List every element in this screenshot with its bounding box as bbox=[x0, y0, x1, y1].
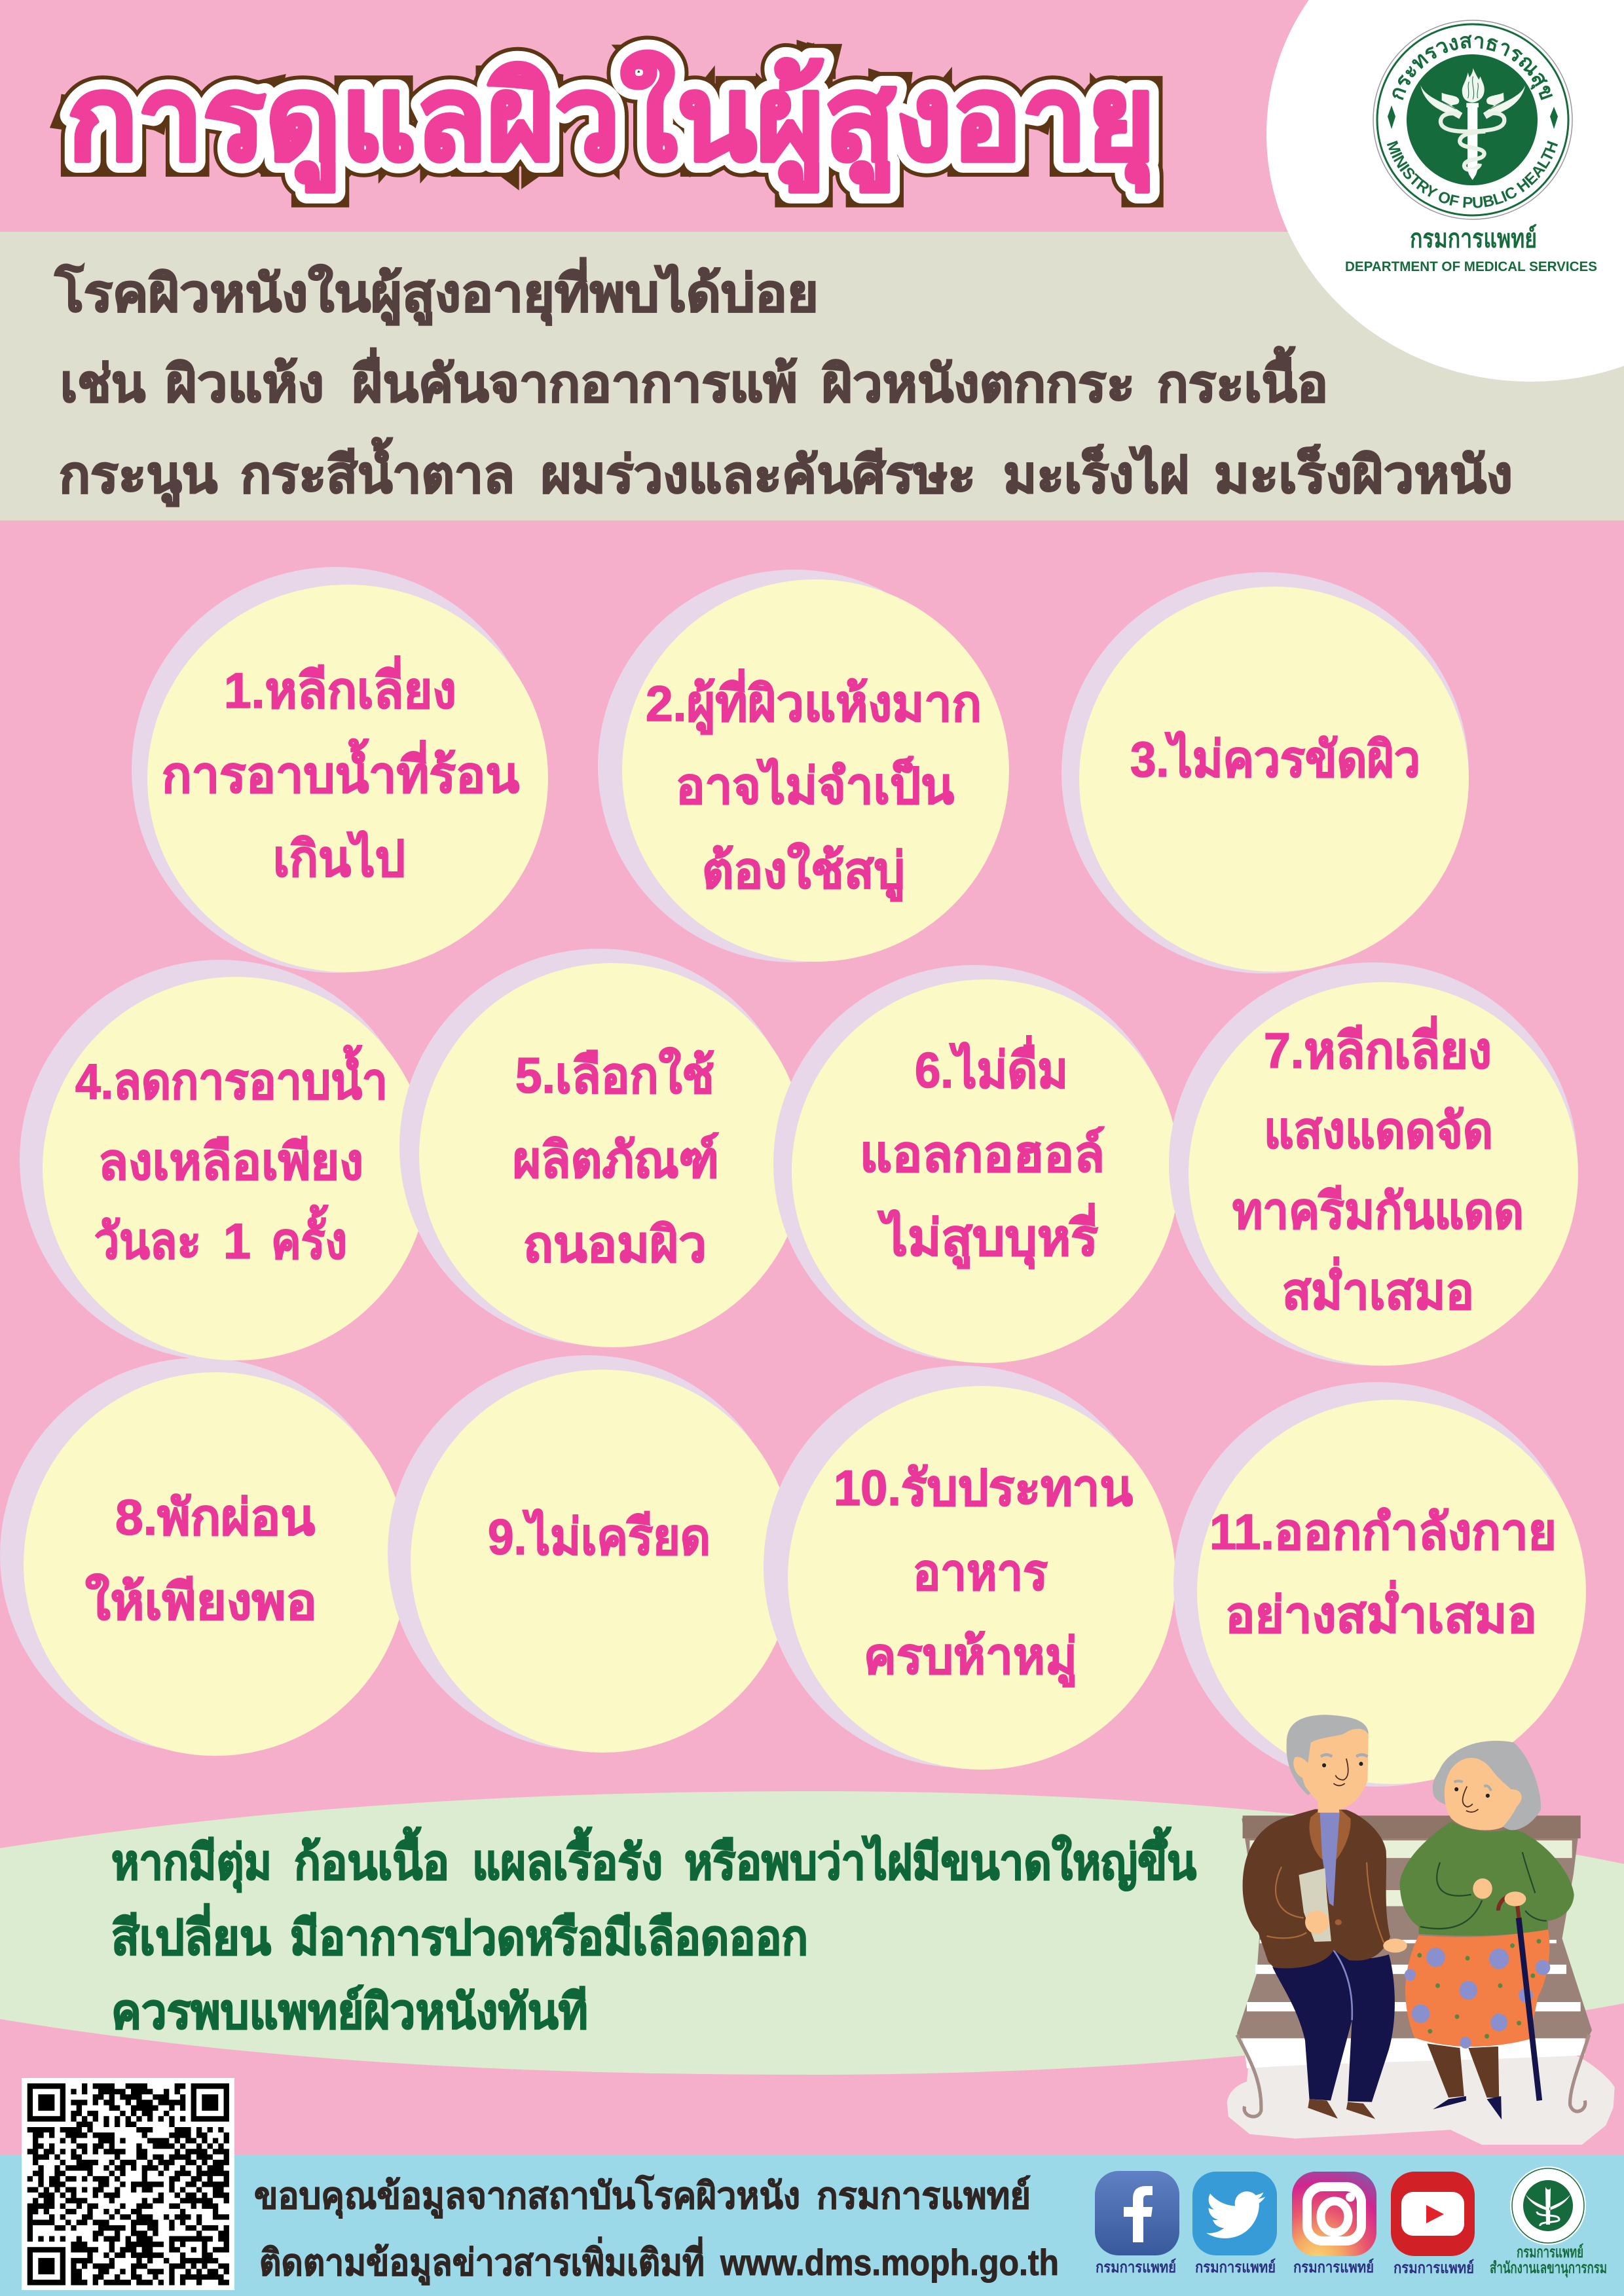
tip 11 bbox=[1173, 1382, 1586, 1787]
footer credit text bbox=[254, 2174, 1059, 2286]
advice text block: หากมีตุ่ม bbox=[111, 1835, 272, 1893]
QR code bbox=[22, 2078, 234, 2290]
intro text block: กระสีน้ำตาล bbox=[240, 437, 515, 503]
intro text block: เช่น bbox=[60, 355, 145, 412]
footer credit text: ขอบคุณข้อมูลจากสถาบันโรคผิวหนัง bbox=[254, 2174, 800, 2219]
seal ornaments bbox=[1388, 105, 1558, 129]
tip 5: 5.เลือกใช้ bbox=[515, 1047, 714, 1104]
logo: Ministry of Public Health seal bbox=[1373, 20, 1573, 220]
footer credit text: www.dms.moph.go.th bbox=[720, 2242, 1059, 2283]
intro text block bbox=[54, 257, 1513, 507]
advice text block: หรือพบว่าไฝมีขนาดใหญ่ขึ้น bbox=[684, 1827, 1196, 1891]
tip 7 bbox=[1169, 962, 1578, 1366]
tip 9 bbox=[388, 1355, 794, 1753]
footer credit text: ติดตามข้อมูลข่าวสารเพิ่มเติมที่ bbox=[259, 2236, 705, 2286]
advice text block: ควรพบแพทย์ผิวหนังทันที bbox=[111, 1984, 588, 2039]
tip 2: 2.ผู้ที่ผิวแห้งมาก bbox=[646, 668, 982, 735]
title: การดูแลผิวในผู้สูงอายุ bbox=[67, 51, 1155, 192]
advice text block: แผลเรื้อรัง bbox=[472, 1827, 663, 1889]
intro text block: กระเนื้อ bbox=[1157, 346, 1328, 412]
staff tip bbox=[1467, 169, 1478, 180]
department name Thai: กรมการแพทย์ bbox=[1410, 224, 1537, 253]
tip 4: 1 bbox=[223, 1214, 251, 1269]
tip 3 bbox=[1061, 572, 1469, 974]
advice text block: สีเปลี่ยน bbox=[111, 1903, 271, 1965]
mini logo label: กรมการแพทย์ bbox=[1517, 2243, 1583, 2261]
bench bbox=[1237, 1815, 1592, 2117]
tip 9: 9.ไม่เครียด bbox=[488, 1508, 710, 1565]
advice text block: ก้อนเนื้อ bbox=[294, 1827, 449, 1889]
tip 1: 1.หลีกเลี่ยง bbox=[224, 655, 456, 719]
tip 5: ถนอมผิว bbox=[523, 1217, 707, 1273]
intro text block: ผิวแห้ง bbox=[166, 355, 324, 412]
seal English ring text: MINISTRY OF PUBLIC HEALTH bbox=[1387, 140, 1558, 208]
department name English: DEPARTMENT OF MEDICAL SERVICES bbox=[1345, 259, 1597, 274]
tip 1: เกินไป bbox=[273, 830, 405, 887]
tip 4: ครั้ง bbox=[271, 1205, 347, 1269]
intro text block: มะเร็งไฝ bbox=[1003, 445, 1189, 503]
tip 2: อาจไม่จำเป็น bbox=[676, 756, 954, 814]
green advice blob bbox=[0, 1791, 1624, 2075]
tip 6: แอลกอฮอล์ bbox=[860, 1127, 1105, 1182]
tip 7: แสงแดดจัด bbox=[1264, 1103, 1493, 1159]
tip 10 bbox=[764, 1366, 1175, 1770]
tip 6: ไม่สูบบุหรี่ bbox=[877, 1203, 1098, 1269]
tip 5: ผลิตภัณฑ์ bbox=[513, 1133, 719, 1188]
label: Facebook: กรมการแพทย์ bbox=[1096, 2258, 1176, 2276]
mini logo label bbox=[1490, 2243, 1607, 2278]
tip 10: 10.รับประทาน bbox=[834, 1461, 1133, 1516]
tip 5 bbox=[399, 949, 805, 1347]
tip 4: ลงเหลือเพียง bbox=[98, 1135, 363, 1190]
label: Instagram: กรมการแพทย์ bbox=[1293, 2258, 1374, 2276]
snakes bbox=[1441, 113, 1504, 170]
man bbox=[1243, 1715, 1407, 2119]
tip 8 bbox=[0, 1358, 407, 1756]
label: YouTube: กรมการแพทย์ bbox=[1393, 2259, 1474, 2277]
label: Twitter: กรมการแพทย์ bbox=[1195, 2258, 1276, 2276]
intro text block: กระนูน bbox=[59, 446, 217, 507]
tip 8: 8.พักผ่อน bbox=[115, 1490, 315, 1546]
tip 7: สม่ำเสมอ bbox=[1282, 1256, 1474, 1320]
tip 7: 7.หลีกเลี่ยง bbox=[1264, 1015, 1492, 1079]
advice text block: มีอาการปวดหรือมีเลือดออก bbox=[290, 1910, 808, 1965]
seal Thai ring text: กระทรวงสาธารณสุข bbox=[1392, 35, 1553, 100]
wings bbox=[1420, 85, 1462, 119]
tip 2: ต้องใช้สบู่ bbox=[702, 842, 905, 902]
advice text block bbox=[111, 1827, 1196, 2039]
tip 1 bbox=[132, 567, 548, 973]
icon: Instagram bbox=[1292, 2172, 1376, 2256]
white corner circle bbox=[1266, 0, 1624, 382]
tip 2 bbox=[598, 570, 1009, 962]
illustration: elderly couple on a bench bbox=[1227, 1715, 1615, 2145]
ground shadow bbox=[1227, 2049, 1615, 2145]
intro text block: ผิวหนังตกกระ bbox=[822, 355, 1135, 412]
intro text block: โรคผิวหนังในผู้สูงอายุที่พบได้บ่อย bbox=[54, 257, 819, 325]
caduceus emblem bbox=[1420, 68, 1525, 180]
tip 6: 6.ไม่ดื่ม bbox=[915, 1035, 1068, 1099]
tip 6 bbox=[773, 965, 1179, 1363]
tip 11: อย่างสม่ำเสมอ bbox=[1225, 1580, 1537, 1643]
flame bbox=[1462, 68, 1485, 103]
intro text block: มะเร็งผิวหนัง bbox=[1214, 445, 1513, 503]
seal centre disc bbox=[1407, 54, 1538, 185]
icon: Twitter bbox=[1192, 2172, 1277, 2255]
tip 4: 4.ลดการอาบน้ำ bbox=[75, 1045, 388, 1110]
intro text block: ผมร่วงและคันศีรษะ bbox=[541, 446, 976, 503]
title: การดูแลผิวในผู้สูงอายุ bbox=[67, 51, 1155, 192]
tip 10: อาหาร bbox=[913, 1545, 1048, 1601]
tip 1: การอาบน้ำที่ร้อน bbox=[162, 738, 519, 803]
tip 8: ให้เพียงพอ bbox=[85, 1573, 317, 1630]
staff bbox=[1467, 106, 1477, 169]
footer credit text: กรมการแพทย์ bbox=[817, 2175, 1031, 2216]
icon: Facebook bbox=[1095, 2171, 1179, 2255]
icon: YouTube bbox=[1391, 2172, 1475, 2256]
tip 10: ครบห้าหมู่ bbox=[864, 1629, 1077, 1687]
tip 4 bbox=[20, 960, 429, 1360]
grey intro band bbox=[0, 232, 1624, 520]
tip 7: ทาครีมกันแดด bbox=[1232, 1184, 1524, 1239]
footer band bbox=[0, 2155, 1624, 2296]
tip 4: วันละ bbox=[94, 1214, 201, 1269]
mini department logo bbox=[1510, 2166, 1586, 2245]
tip 11: 11.ออกกำลังกาย bbox=[1209, 1504, 1557, 1560]
tip 3: 3.ไม่ควรขัดผิว bbox=[1130, 731, 1420, 788]
intro text block: ผื่นคันจากอาการแพ้ bbox=[352, 348, 798, 412]
title: การดูแลผิวในผู้สูงอายุ bbox=[67, 51, 1155, 192]
woman bbox=[1399, 1741, 1574, 2119]
